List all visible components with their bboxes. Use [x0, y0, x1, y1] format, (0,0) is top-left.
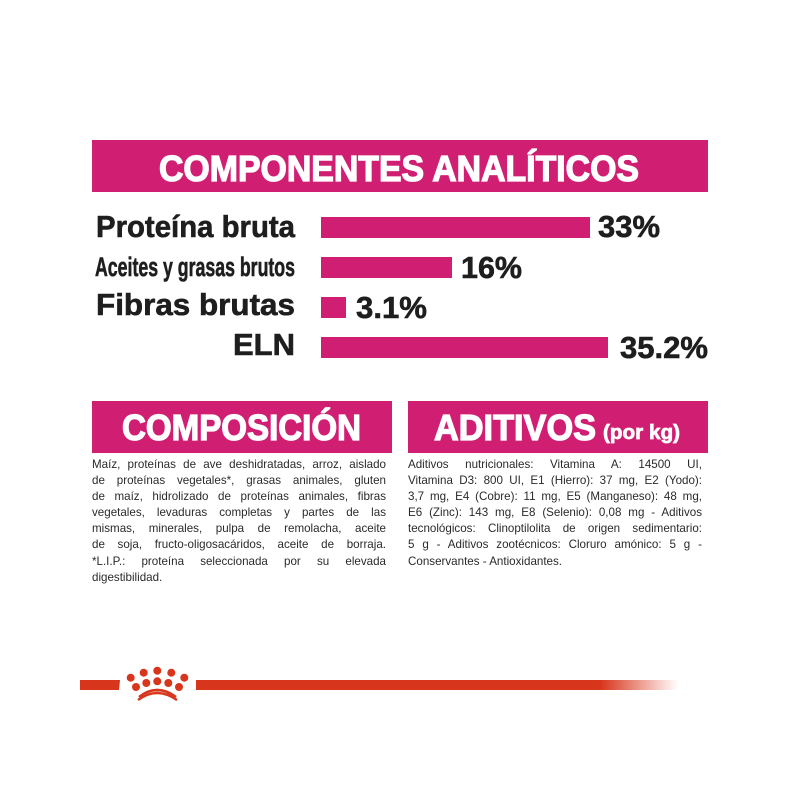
- text block: composición: *L.I.P.: proteína seleccionada por su elevada: [92, 555, 386, 568]
- text block: aditivos: 3,7 mg, E4 (Cobre): 11 mg, E5 (Manganeso): 48 mg,: [408, 490, 702, 503]
- footer brand line with crown logo: [80, 667, 678, 700]
- panel: componentes analíticos header: [92, 140, 708, 192]
- panel: componentes analíticos header: COMPONENTES ANALÍTICOS: [159, 148, 639, 189]
- text block: aditivos: E6 (Zinc): 143 mg, E8 (Selenio): 0,08 mg - Aditivos: [408, 506, 702, 519]
- row: fibras brutas: [96, 287, 427, 325]
- text block: aditivos: Aditivos nutricionales: Vitamina A: 14500 UI,: [408, 458, 702, 471]
- row: aceites y grasas brutos: [95, 250, 522, 285]
- text block: composición: de soja, fructo-oligosacáridos, aceite de borraja.: [92, 538, 386, 551]
- text block: aditivos: Conservantes - Antioxidantes.: [408, 555, 562, 568]
- heading: aditivos: (por kg): [603, 422, 680, 444]
- text block: composición: mismas, minerales, pulpa de remolacha, aceite: [92, 522, 386, 535]
- heading: aditivos: ADITIVOS: [434, 407, 596, 448]
- left red stripe: [80, 680, 120, 690]
- icon: crown: [127, 667, 188, 700]
- right red stripe fading out: [196, 680, 678, 690]
- heading: composición: [92, 401, 392, 453]
- row: ELN: ELN: [233, 327, 295, 362]
- text block: composición: [92, 458, 386, 584]
- bar chart: analytical components: [95, 209, 708, 365]
- text block: composición: de maíz, hidrolizado de proteínas animales, fibras: [92, 490, 386, 503]
- heading: aditivos: [408, 401, 708, 453]
- row: aceites y grasas brutos: Aceites y grasas brutos: [95, 252, 295, 282]
- text block: composición: digestibilidad.: [92, 571, 162, 584]
- row: ELN: [233, 327, 708, 365]
- row: aceites y grasas brutos: 16%: [461, 250, 522, 285]
- text block: aditivos: [408, 458, 702, 568]
- row: proteína bruta: 33%: [598, 209, 660, 244]
- heading: composición: COMPOSICIÓN: [122, 406, 361, 448]
- row: fibras brutas: 3.1%: [356, 290, 427, 325]
- text block: composición: vegetales, levaduras completas y partes de las: [92, 506, 386, 519]
- row: fibras brutas: Fibras brutas: [96, 287, 295, 322]
- text block: aditivos: tecnológicos: Clinoptilolita de origen sedimentario:: [408, 522, 702, 535]
- text block: aditivos: Vitamina D3: 800 UI, E1 (Hierro): 37 mg, E2 (Yodo):: [408, 474, 702, 487]
- row: ELN: 35.2%: [620, 330, 708, 365]
- text block: composición: Maíz, proteínas de ave deshidratadas, arroz, aislado: [92, 458, 386, 471]
- row: proteína bruta: Proteína bruta: [96, 209, 296, 244]
- text block: composición: de proteínas vegetales*, grasas animales, gluten: [92, 474, 386, 487]
- text block: aditivos: 5 g - Aditivos zootécnicos: Cloruro amónico: 5 g -: [408, 538, 702, 551]
- row: proteína bruta: [96, 209, 660, 244]
